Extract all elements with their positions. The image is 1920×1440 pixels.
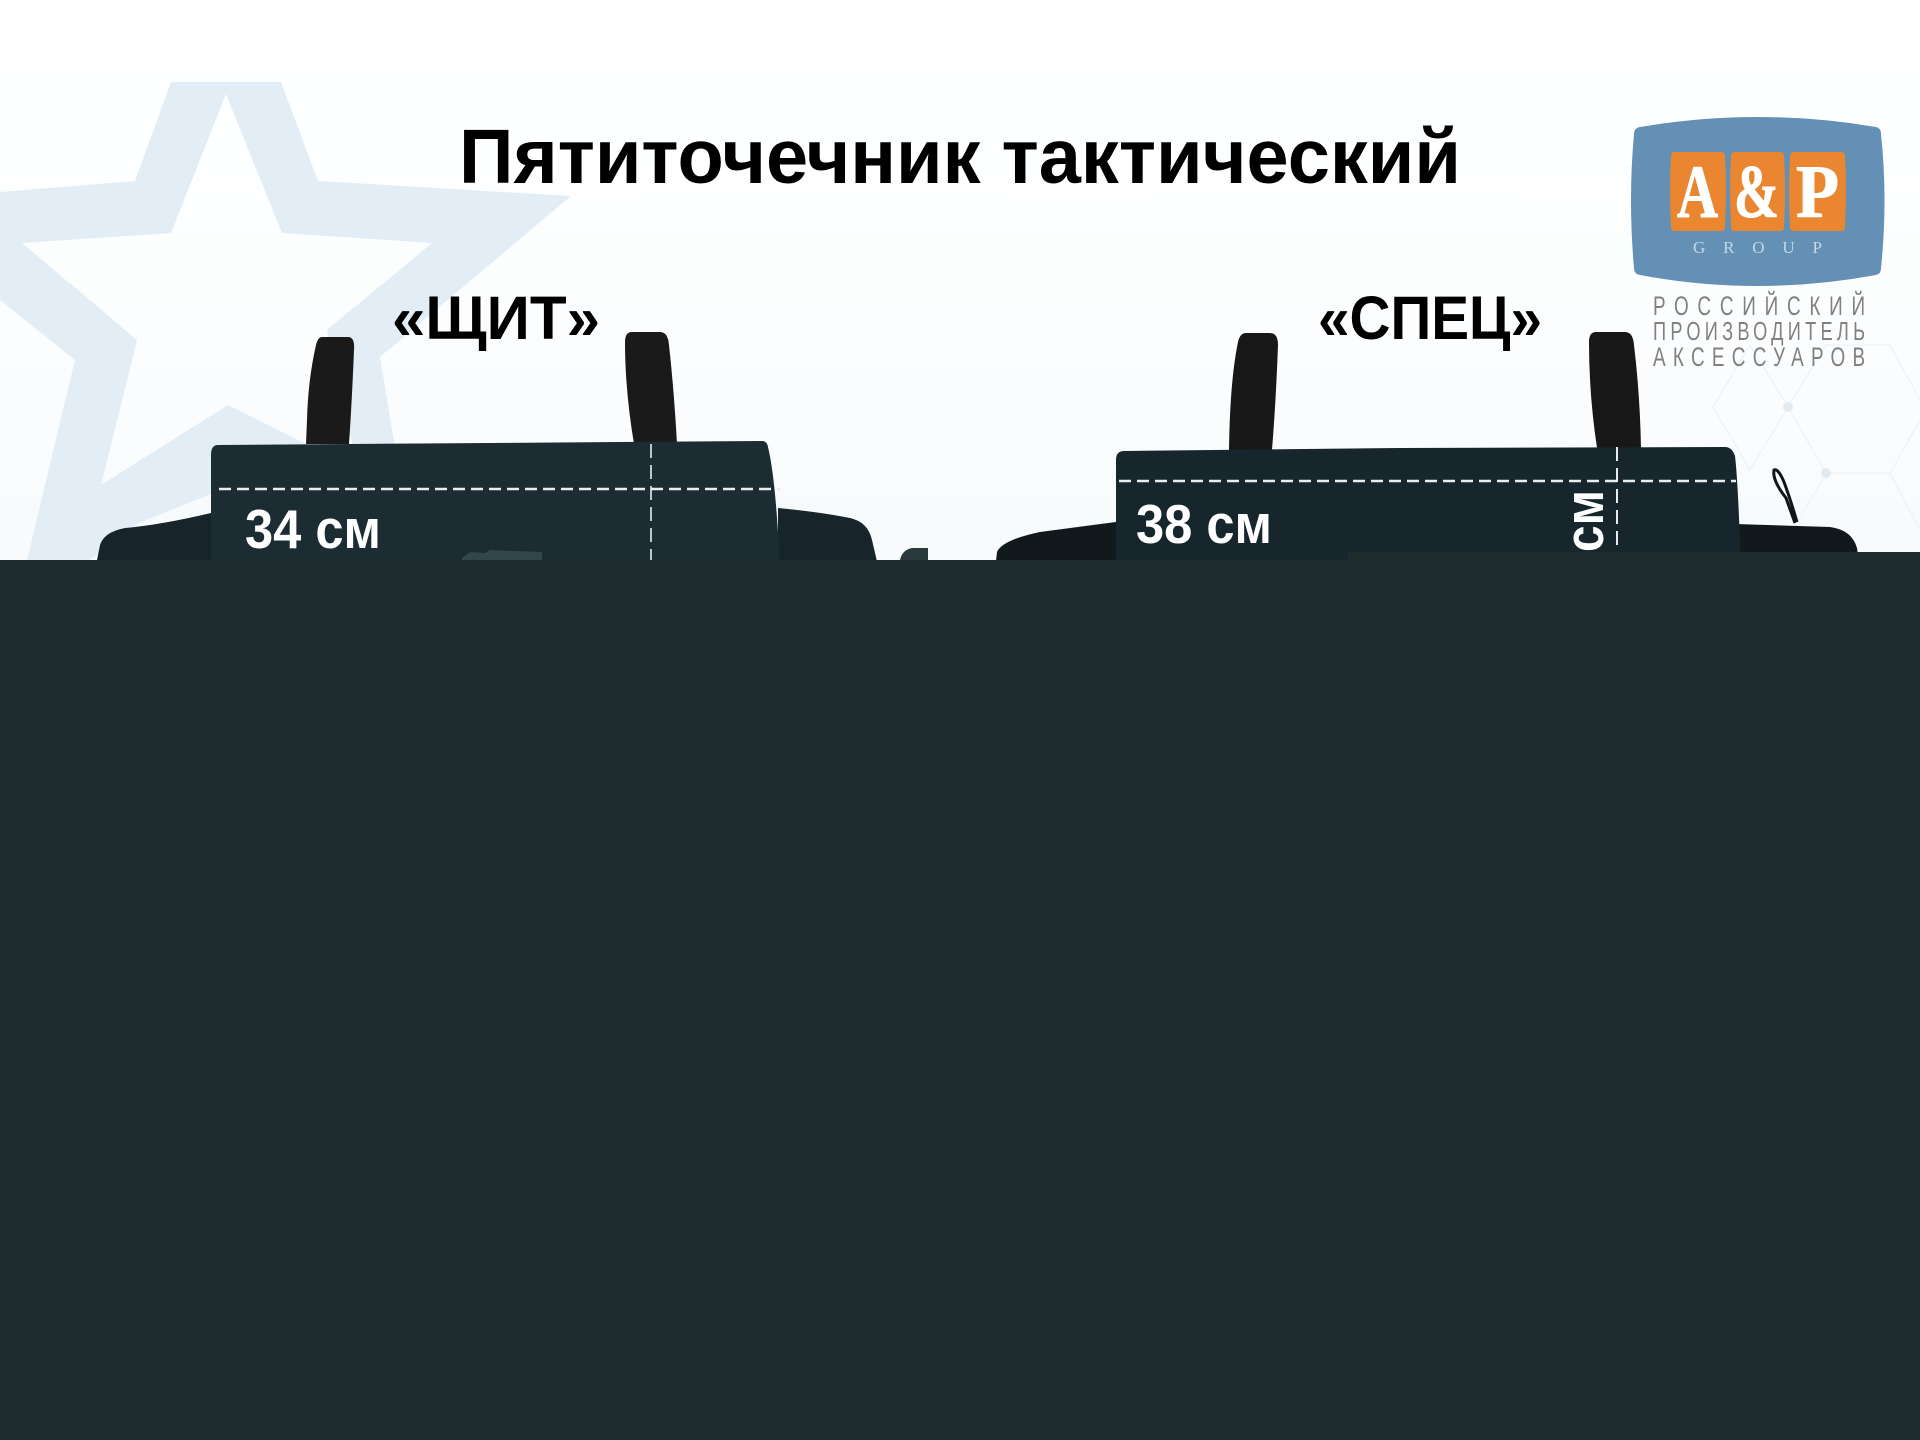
logo: A&P Group [1631,117,1884,372]
label: rotated см: см [1553,490,1615,552]
height dashed line [1616,447,1618,560]
product: СПЕЦ pouch [995,332,1860,570]
left belt strap [95,513,211,570]
logo tile ampersand [1730,152,1785,231]
width dashed line [1119,480,1736,482]
page background [0,0,1920,600]
logo letter P: P [1796,151,1839,234]
width dashed line [219,488,780,490]
heading: ЩИТ: «ЩИТ» [392,284,600,352]
height dashed line [650,444,652,560]
logo letter ampersand: & [1734,151,1779,234]
logo letter A: A [1677,151,1718,234]
heading: СПЕЦ: «СПЕЦ» [1318,284,1542,352]
dark lower panel [0,552,1920,1440]
label: 34 см: 34 см [245,498,381,560]
right buckle [900,548,928,560]
tagline line 3: АКСЕССУАРОВ [1653,342,1865,372]
tagline line 1: РОССИЙСКИЙ [1653,290,1865,321]
pouch body [211,441,780,570]
pouch body [1116,447,1741,570]
centre buckle [462,550,542,560]
background star emblem [0,82,571,600]
left loop [1229,333,1278,450]
left loop [306,337,354,444]
right loop [625,332,677,444]
right loop [1589,332,1641,448]
logo tile A [1670,152,1726,231]
tagline line 2: ПРОИЗВОДИТЕЛЬ [1653,317,1865,346]
left belt strap [995,522,1116,570]
drawcord [1774,470,1797,523]
product: ЩИТ pouch [95,332,928,570]
logo tile P [1789,152,1846,231]
background hexagon network [1713,345,1920,535]
logo blue plate [1631,117,1884,286]
logo word GROUP: GROUP [1693,238,1822,257]
right belt strap [778,508,879,570]
label: 38 см: 38 см [1136,493,1272,555]
title: Пятиточечник тактический [459,114,1461,200]
right belt strap [1735,524,1860,570]
